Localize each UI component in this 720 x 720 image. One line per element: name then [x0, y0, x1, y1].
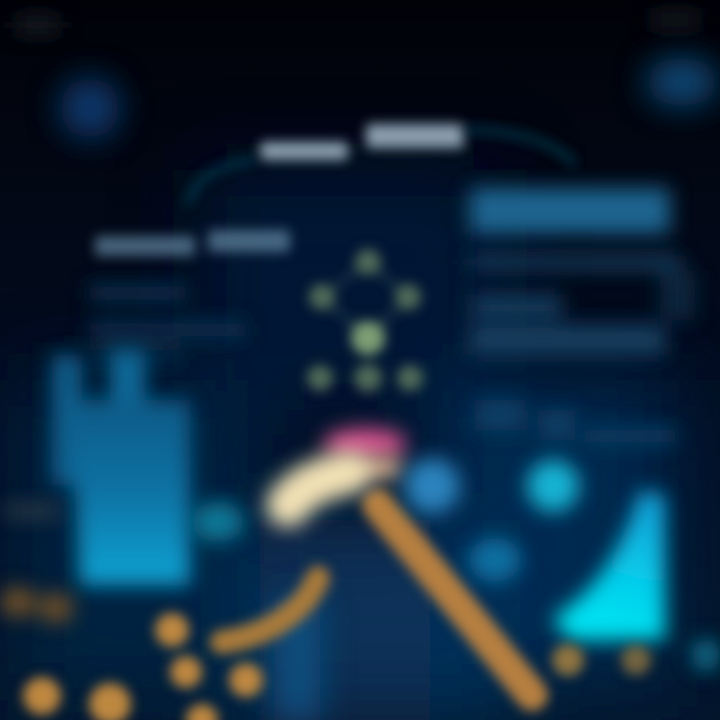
- left city cyan: [52, 350, 190, 585]
- right text block: [470, 255, 695, 355]
- top right glow: [646, 58, 718, 106]
- blue circle: [404, 458, 460, 514]
- center dark column: [275, 600, 320, 720]
- right banner: [470, 188, 670, 234]
- curved orange band: [222, 578, 318, 642]
- top corner labels: [15, 14, 700, 32]
- left text block: [90, 285, 245, 362]
- right orange nodes: [552, 644, 651, 676]
- connector arcs: [188, 130, 575, 205]
- pink glow: [323, 428, 407, 460]
- right lower text block: [475, 400, 675, 444]
- small dim orange marks: [0, 505, 73, 623]
- title: [260, 124, 464, 160]
- orange nodes: [23, 613, 263, 720]
- cream ribbon: [288, 467, 392, 505]
- left heading: [95, 230, 290, 256]
- top left glow: [60, 78, 120, 138]
- right cyan chart: [552, 490, 665, 640]
- right cyan blobs: [469, 460, 579, 582]
- brown diagonal band: [378, 505, 532, 695]
- teal blob: [192, 502, 244, 542]
- background glow: [20, 170, 670, 720]
- far right teal mark: [692, 639, 720, 671]
- network diagram: [307, 249, 423, 392]
